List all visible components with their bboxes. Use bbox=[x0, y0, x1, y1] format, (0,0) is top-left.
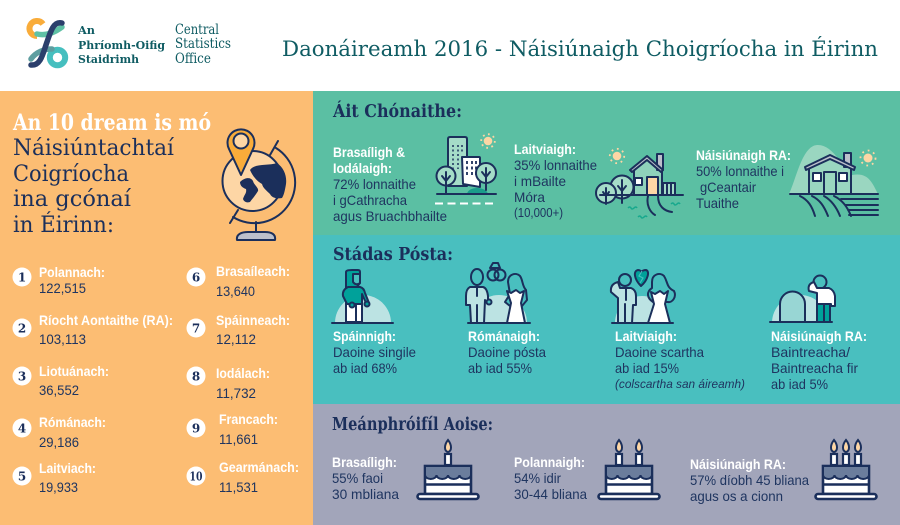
rank 10: 10 bbox=[190, 470, 202, 484]
rank 2 bbox=[12, 312, 173, 347]
panel: marital status bbox=[313, 235, 900, 404]
text: Poles: Polannaigh: bbox=[514, 454, 585, 470]
text: Latvians: (10,000+) bbox=[514, 206, 563, 220]
rank 5: 19,933 bbox=[39, 479, 78, 495]
text: Brazilians and Italians bbox=[333, 144, 447, 224]
text: Latvians: ab iad 15% bbox=[615, 360, 679, 376]
text: Brazilians and Italians: i gCathracha bbox=[333, 192, 407, 208]
text: Romanians bbox=[468, 328, 546, 376]
text: Poles bbox=[514, 454, 587, 502]
rank 7: 7 bbox=[192, 322, 200, 336]
panel heading: Coigríocha bbox=[13, 161, 129, 187]
icon: CSO logo bbox=[29, 21, 65, 65]
text: Latvians: 35% lonnaithe bbox=[514, 157, 597, 173]
text: Latvians: (colscartha san áireamh) bbox=[615, 377, 745, 391]
rank 6: 13,640 bbox=[216, 283, 255, 299]
rank 4: 29,186 bbox=[39, 434, 79, 450]
text: Spanish: ab iad 68% bbox=[333, 360, 397, 376]
rank 2: 2 bbox=[18, 322, 26, 336]
rank 3 bbox=[12, 363, 109, 398]
rank 1: 1 bbox=[18, 270, 26, 284]
rank 3: Liotuánach: bbox=[39, 363, 109, 379]
icon: married couple bbox=[466, 263, 530, 323]
rank 8 bbox=[186, 365, 270, 401]
header with logo and title bbox=[29, 21, 878, 67]
text: Romanians: ab iad 55% bbox=[468, 360, 532, 376]
icon: cake with one candle bbox=[418, 440, 478, 499]
rank 6: Brasaíleach: bbox=[216, 263, 290, 279]
rank 9 bbox=[186, 411, 278, 447]
text: Romanians: Daoine pósta bbox=[468, 344, 546, 360]
text: UK nationals: agus os a cionn bbox=[690, 488, 783, 504]
panel: place of residence bbox=[313, 91, 900, 235]
rank 6: 6 bbox=[192, 270, 200, 284]
text: Latvians: Daoine scartha bbox=[615, 344, 704, 360]
text: UK nationals: Baintreacha fir bbox=[771, 360, 858, 376]
rank 3: 36,552 bbox=[39, 382, 79, 398]
rank 8: 11,732 bbox=[216, 385, 256, 401]
text: Brazilians and Italians: agus Bruachbhailte bbox=[333, 208, 447, 224]
icon: widowed person at headstone bbox=[770, 276, 835, 323]
icon: single person bbox=[332, 270, 393, 323]
text: Latvians: Móra bbox=[514, 189, 545, 205]
text: Brazilians and Italians: Brasaíligh & bbox=[333, 144, 405, 160]
text: UK nationals bbox=[771, 328, 867, 392]
rank 10: Gearmánach: bbox=[219, 459, 299, 475]
rank 7: 12,112 bbox=[216, 331, 256, 347]
text: Spanish: Spáinnigh: bbox=[333, 328, 396, 344]
rank 7: Spáinneach: bbox=[216, 312, 290, 328]
rank 7 bbox=[186, 312, 290, 347]
icon: town house bbox=[596, 149, 683, 218]
text: UK nationals bbox=[696, 147, 791, 211]
rank 1 bbox=[12, 264, 105, 296]
section heading: Meánphróifíl Aoise: bbox=[332, 415, 493, 435]
rank 8: Iodálach: bbox=[216, 365, 270, 381]
rank 4 bbox=[12, 414, 106, 450]
rank 10: 11,531 bbox=[219, 479, 258, 495]
text: UK nationals: Náisiúnaigh RA: bbox=[696, 147, 791, 163]
text: Latvians: i mBailte bbox=[514, 173, 566, 189]
rank 4: 4 bbox=[18, 422, 26, 436]
text: UK nationals: 50% lonnaithe i bbox=[696, 163, 784, 179]
rank 3: 3 bbox=[18, 370, 26, 384]
rank 9: 11,661 bbox=[219, 431, 258, 447]
logo text: Irish name: Phríomh-Oifig bbox=[78, 38, 165, 52]
text: Brazilians: 30 mbliana bbox=[332, 486, 399, 502]
rank 1: 122,515 bbox=[39, 280, 86, 296]
section heading: Áit Chónaithe: bbox=[332, 101, 462, 122]
rank 5 bbox=[12, 460, 96, 495]
text: Brazilians and Italians: 72% lonnaithe bbox=[333, 176, 416, 192]
icon: cake with three candles bbox=[816, 440, 876, 499]
text: UK nationals: ab iad 5% bbox=[771, 376, 828, 392]
logo text: English name: Office bbox=[175, 51, 211, 67]
text: Poles: 30-44 bliana bbox=[514, 486, 587, 502]
text: Latvians bbox=[615, 328, 745, 391]
rank 8: 8 bbox=[192, 370, 200, 384]
icon: cake with two candles bbox=[598, 440, 660, 499]
rank 5: 5 bbox=[18, 470, 26, 484]
logo text: English name bbox=[175, 22, 231, 67]
text: UK nationals: Náisiúnaigh RA: bbox=[771, 328, 867, 344]
panel heading: An 10 dream is mó bbox=[12, 110, 211, 136]
logo text: Irish name: Staidrimh bbox=[78, 52, 140, 66]
logo text: English name: Central bbox=[175, 22, 219, 38]
rank 4: Rómánach: bbox=[39, 414, 106, 430]
text: Spanish: Daoine singile bbox=[333, 344, 416, 360]
text: Romanians: Rómánaigh: bbox=[468, 328, 540, 344]
text: UK nationals: Baintreacha/ bbox=[771, 344, 850, 360]
text: UK nationals: Tuaithe bbox=[696, 195, 739, 211]
logo text: English name: Statistics bbox=[175, 36, 231, 52]
icon: city bbox=[435, 134, 496, 204]
rank 5: Laitviach: bbox=[39, 460, 96, 476]
rank 1: Polannach: bbox=[39, 264, 105, 280]
rank 9: 9 bbox=[192, 422, 200, 436]
text: Poles: 54% idir bbox=[514, 470, 561, 486]
text: Latvians bbox=[514, 141, 597, 220]
logo text: Irish name bbox=[77, 23, 165, 66]
rank 2: 103,113 bbox=[39, 331, 86, 347]
text: Brazilians: 55% faoi bbox=[332, 470, 383, 486]
rank 6 bbox=[186, 263, 290, 299]
title: Daonáireamh 2016 - Náisiúnaigh Choigríocha in Éirinn bbox=[282, 35, 878, 62]
text: UK nationals bbox=[690, 456, 809, 504]
icon: rural house bbox=[789, 145, 878, 216]
rank 10 bbox=[186, 459, 299, 495]
rank 2: Ríocht Aontaithe (RA): bbox=[39, 312, 173, 328]
section heading: Stádas Pósta: bbox=[333, 245, 453, 265]
icon: globe with map pin bbox=[222, 129, 295, 240]
logo text: Irish name: An bbox=[77, 23, 96, 37]
rank 9: Francach: bbox=[219, 411, 278, 427]
panel heading bbox=[12, 110, 211, 238]
panel heading: Náisiúntachtaí bbox=[13, 135, 175, 161]
icon: separated couple bbox=[611, 270, 675, 323]
panel heading: ina gcónaí bbox=[13, 186, 132, 212]
text: UK nationals: gCeantair bbox=[700, 179, 756, 195]
text: UK nationals: 57% díobh 45 bliana bbox=[690, 472, 809, 488]
text: Brazilians bbox=[332, 454, 399, 502]
text: Latvians: Laitviaigh: bbox=[615, 328, 677, 344]
text: Brazilians and Italians: Iodálaigh: bbox=[333, 160, 392, 176]
text: UK nationals: Náisiúnaigh RA: bbox=[690, 456, 786, 472]
text: Spanish bbox=[333, 328, 416, 376]
text: Latvians: Laitviaigh: bbox=[514, 141, 576, 157]
text: Brazilians: Brasaíligh: bbox=[332, 454, 397, 470]
panel: average age profile bbox=[313, 404, 900, 525]
panel heading: in Éirinn: bbox=[13, 211, 114, 238]
panel: top 10 foreign nationalities bbox=[0, 91, 313, 525]
